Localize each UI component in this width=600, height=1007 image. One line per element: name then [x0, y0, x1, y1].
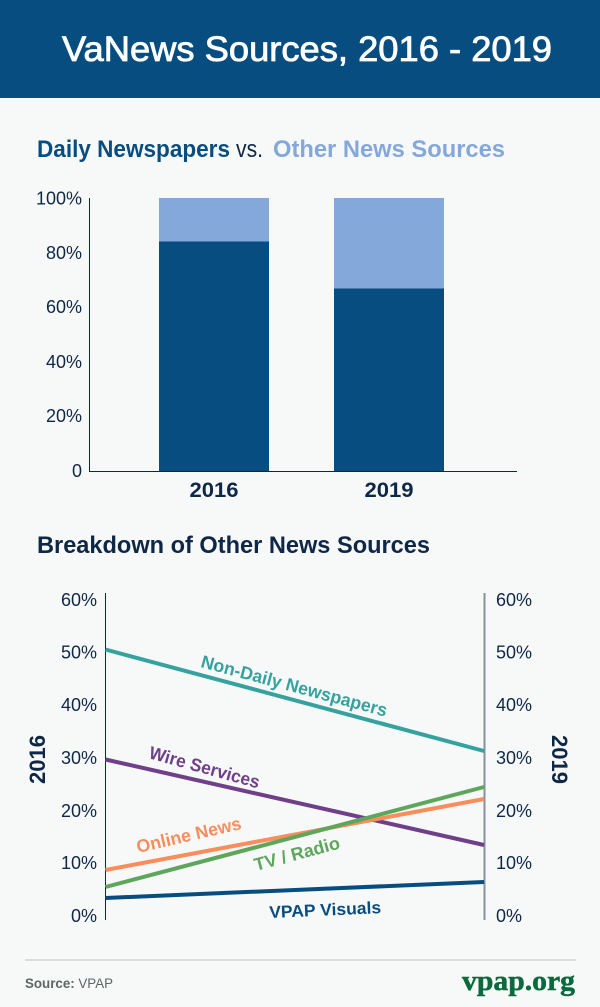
- right axis labels: 50%: [496, 642, 532, 662]
- line: vpap visuals: [106, 882, 484, 898]
- axis title 2019: 2019: [547, 735, 572, 784]
- heading: breakdown: Breakdown of Other News Sources: [37, 532, 430, 559]
- slope chart: [25, 590, 572, 926]
- heading: daily vs other: vs.: [236, 136, 263, 163]
- left axis labels: 60%: [61, 590, 97, 610]
- title: VaNews Sources, 2016 - 2019: [62, 30, 552, 69]
- line: non-daily newspapers: [106, 650, 484, 751]
- left axis: [104, 593, 106, 920]
- left axis labels: 30%: [61, 748, 97, 768]
- footer: [25, 960, 576, 997]
- line: wire services: [106, 760, 484, 845]
- y axis labels: 20%: [46, 406, 82, 426]
- y axis labels: 60%: [46, 297, 82, 317]
- right axis labels: 0%: [496, 906, 522, 926]
- logo wordmark: vpap.org: [462, 965, 575, 997]
- x label 2016: 2016: [190, 479, 238, 502]
- y axis labels: 40%: [46, 352, 82, 372]
- label: wire services: Wire Services: [147, 743, 262, 792]
- label: vpap visuals: VPAP Visuals: [269, 898, 382, 922]
- right axis labels: 40%: [496, 695, 532, 715]
- label: tv / radio: TV / Radio: [252, 833, 342, 875]
- source: Source: VPAP: [25, 975, 113, 991]
- heading: daily vs other: Other News Sources: [273, 136, 505, 163]
- right axis labels: 20%: [496, 801, 532, 821]
- y axis labels: 0: [72, 461, 82, 481]
- heading: daily vs other: Daily Newspapers: [37, 136, 230, 163]
- right axis: [484, 593, 486, 920]
- left axis labels: 10%: [61, 853, 97, 873]
- right axis labels: 10%: [496, 853, 532, 873]
- axis title 2016: 2016: [25, 735, 50, 784]
- bar 2016: [159, 198, 269, 471]
- line: online news: [106, 799, 484, 870]
- label: online news: Online News: [134, 813, 243, 857]
- left axis labels: 50%: [61, 642, 97, 662]
- y axis labels: [36, 188, 82, 481]
- line: tv / radio: [106, 787, 484, 887]
- y axis labels: 100%: [36, 188, 82, 208]
- right axis labels: [496, 590, 532, 926]
- right axis labels: 60%: [496, 590, 532, 610]
- left axis labels: 20%: [61, 801, 97, 821]
- y axis labels: 80%: [46, 243, 82, 263]
- title banner: [0, 0, 600, 98]
- left axis labels: [61, 590, 97, 926]
- label: non-daily newspapers: Non-Daily Newspapers: [199, 652, 390, 721]
- bar 2019: [334, 198, 444, 471]
- left axis labels: 40%: [61, 695, 97, 715]
- axes: [90, 198, 517, 472]
- right axis labels: 30%: [496, 748, 532, 768]
- left axis labels: 0%: [71, 906, 97, 926]
- x label 2019: 2019: [364, 479, 414, 502]
- heading: daily vs other: [37, 136, 505, 163]
- stacked bar chart: [36, 188, 517, 502]
